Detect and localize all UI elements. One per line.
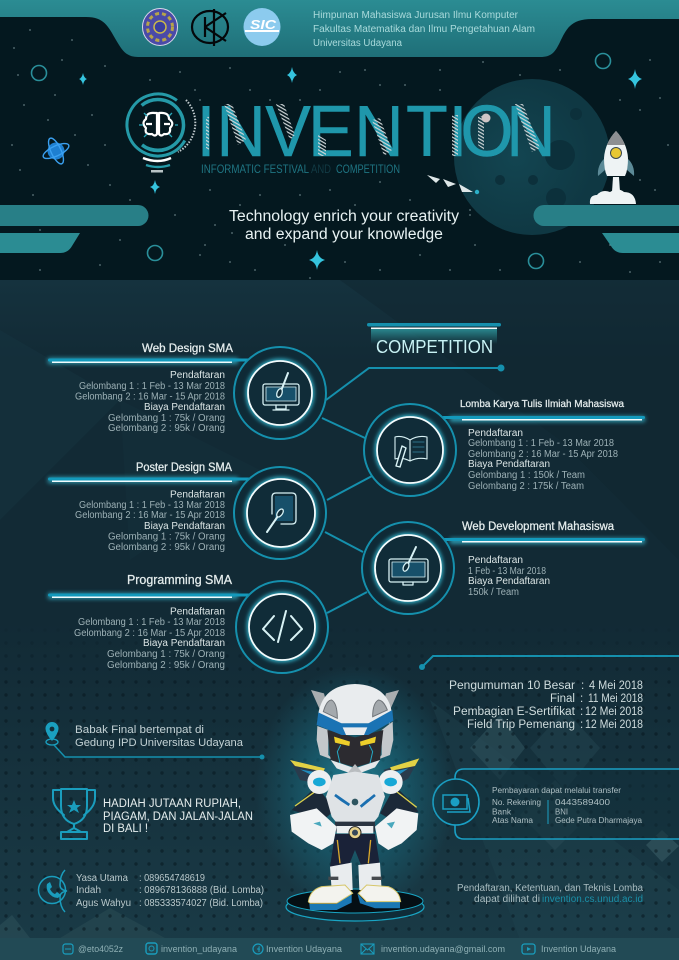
details: Gelombang 2 : 16 Mar - 15 Apr 2018 bbox=[468, 449, 618, 460]
icon: monitor and brush bbox=[362, 522, 454, 614]
details: Gelombang 2 : 16 Mar - 15 Apr 2018 bbox=[74, 628, 225, 639]
title bar bbox=[48, 477, 250, 483]
payment details bbox=[492, 786, 643, 825]
footer bar bbox=[0, 938, 679, 960]
schedule: Field Trip Pemenang bbox=[467, 719, 575, 731]
contacts: : 085333574027 (Bid. Lomba) bbox=[139, 898, 263, 909]
final venue: Gedung IPD Universitas Udayana bbox=[75, 737, 244, 749]
details: Biaya Pendaftaran bbox=[143, 638, 225, 649]
payment details: Gede Putra Dharmajaya bbox=[555, 816, 643, 825]
details: Biaya Pendaftaran bbox=[468, 576, 550, 587]
heading: Web Design SMA bbox=[142, 343, 233, 355]
panel: lomba karya tulis bbox=[364, 398, 645, 496]
schedule: : bbox=[581, 680, 584, 692]
details: Gelombang 2 : 16 Mar - 15 Apr 2018 bbox=[75, 392, 225, 402]
heading: Web Development Mahasiswa bbox=[462, 521, 615, 533]
registration note: Pendaftaran, Ketentuan, dan Teknis Lomba bbox=[457, 883, 643, 894]
subtitle: INFORMATIC FESTIVAL bbox=[201, 162, 309, 176]
icon: rocket bbox=[590, 131, 636, 204]
social: instagram: invention_udayana bbox=[161, 944, 237, 954]
details bbox=[74, 606, 225, 671]
prize: PIAGAM, DAN JALAN-JALAN bbox=[103, 811, 253, 823]
details bbox=[75, 490, 225, 553]
payment details: Atas Nama bbox=[492, 816, 534, 825]
social: facebook: Invention Udayana bbox=[266, 944, 342, 954]
social: @eto4052z: @eto4052z bbox=[78, 944, 123, 954]
registration note: invention.cs.unud.ac.id bbox=[542, 894, 643, 905]
lower background bbox=[0, 280, 679, 960]
subtitle: COMPETITION bbox=[336, 162, 400, 176]
header background with stars bbox=[0, 0, 679, 280]
details: Gelombang 2 : 95k / Orang bbox=[107, 660, 225, 671]
payment details: No. Rekening bbox=[492, 798, 541, 807]
icon: money bbox=[433, 779, 479, 825]
details: 1 Feb - 13 Mar 2018 bbox=[468, 566, 546, 577]
ring decorations bbox=[32, 54, 610, 268]
panel: web design SMA bbox=[48, 343, 326, 439]
schedule bbox=[419, 656, 679, 731]
icon: book and pencil bbox=[364, 404, 456, 496]
details: Gelombang 1 : 75k / Orang bbox=[107, 649, 225, 660]
mascot robot bbox=[255, 665, 455, 921]
logo: SIC bbox=[244, 8, 280, 46]
connector lines bbox=[322, 368, 500, 613]
details: Gelombang 2 : 16 Mar - 15 Apr 2018 bbox=[75, 510, 225, 521]
prize: DI BALI ! bbox=[103, 823, 148, 835]
registration note: dapat dilihat di bbox=[474, 894, 540, 905]
title bar bbox=[48, 593, 250, 599]
payment details: 0443589400 bbox=[555, 798, 611, 807]
competition heading bbox=[367, 323, 504, 372]
heading: Programming SMA bbox=[127, 573, 233, 587]
title bar bbox=[442, 416, 645, 422]
icon: shooting rockets bbox=[427, 175, 479, 194]
icon: map pin bbox=[45, 722, 59, 745]
contacts bbox=[38, 870, 264, 912]
schedule: : bbox=[580, 719, 583, 731]
details bbox=[75, 370, 225, 434]
details bbox=[468, 555, 550, 598]
registration note bbox=[457, 883, 643, 905]
panel: payment bbox=[433, 769, 679, 839]
sparkle stars bbox=[79, 67, 642, 270]
social: youtube: Invention Udayana bbox=[541, 944, 616, 954]
details: Gelombang 1 : 150k / Team bbox=[468, 470, 585, 481]
logo: university seal bbox=[142, 8, 178, 46]
side pills bbox=[0, 205, 679, 253]
icon: code brackets bbox=[236, 581, 328, 673]
contacts: Agus Wahyu bbox=[76, 898, 131, 909]
panel: poster design SMA bbox=[48, 462, 326, 559]
details: Gelombang 1 : 1 Feb - 13 Mar 2018 bbox=[79, 500, 225, 511]
organiser text: Fakultas Matematika dan Ilmu Pengetahuan Alam bbox=[313, 24, 535, 35]
schedule: : bbox=[580, 693, 583, 705]
final venue: Babak Final bertempat di bbox=[75, 724, 204, 736]
contacts: Yasa Utama bbox=[76, 873, 128, 884]
subtitle bbox=[201, 162, 400, 176]
details: Gelombang 2 : 175k / Team bbox=[468, 481, 584, 492]
final venue bbox=[45, 722, 264, 760]
panel: programming SMA bbox=[48, 573, 328, 673]
details: Biaya Pendaftaran bbox=[468, 459, 550, 470]
details: Gelombang 1 : 1 Feb - 13 Mar 2018 bbox=[78, 617, 225, 628]
heading: Poster Design SMA bbox=[136, 462, 232, 474]
icon: phone bbox=[38, 870, 67, 912]
prize bbox=[53, 789, 253, 839]
details: Pendaftaran bbox=[170, 370, 225, 381]
schedule: Pengumuman 10 Besar bbox=[449, 680, 575, 692]
icon: brain light bulb bbox=[116, 83, 200, 172]
title bar bbox=[442, 538, 645, 544]
details: Biaya Pendaftaran bbox=[144, 402, 225, 413]
details: Gelombang 1 : 75k / Orang bbox=[108, 413, 225, 424]
schedule: Pembagian E-Sertifikat bbox=[453, 706, 576, 718]
payment details: Bank bbox=[492, 808, 512, 816]
title bar bbox=[48, 358, 250, 364]
details: 150k / Team bbox=[468, 587, 519, 598]
schedule: 12 Mei 2018 bbox=[585, 719, 643, 731]
competition heading: COMPETITION bbox=[376, 337, 493, 357]
tagline bbox=[229, 208, 459, 243]
payment details: Pembayaran dapat melalui transfer bbox=[492, 786, 621, 795]
icon: trophy bbox=[53, 789, 95, 839]
details: Pendaftaran bbox=[170, 490, 225, 500]
organiser text: Universitas Udayana bbox=[313, 38, 402, 49]
prize: HADIAH JUTAAN RUPIAH, bbox=[103, 798, 241, 810]
details: Pendaftaran bbox=[468, 555, 523, 566]
logo: K emblem bbox=[192, 9, 228, 46]
subtitle: AND bbox=[311, 162, 331, 176]
tagline: and expand your knowledge bbox=[245, 226, 443, 243]
details: Gelombang 2 : 95k / Orang bbox=[108, 423, 225, 434]
icon: planet bbox=[41, 136, 71, 166]
contacts: : 089654748619 bbox=[139, 873, 205, 884]
schedule: 12 Mei 2018 bbox=[585, 706, 643, 718]
details: Gelombang 1 : 75k / Orang bbox=[108, 532, 225, 542]
social: email: invention.udayana@gmail.com bbox=[381, 944, 505, 954]
moon bbox=[454, 79, 610, 235]
icon: monitor and brush bbox=[234, 347, 326, 439]
details: Pendaftaran bbox=[468, 428, 523, 439]
details: Gelombang 1 : 1 Feb - 13 Mar 2018 bbox=[468, 438, 614, 449]
details: Gelombang 1 : 1 Feb - 13 Mar 2018 bbox=[79, 381, 225, 392]
schedule: Final bbox=[550, 693, 575, 705]
details: Pendaftaran bbox=[170, 606, 225, 618]
schedule: : bbox=[580, 706, 583, 718]
heading: Lomba Karya Tulis Ilmiah Mahasiswa bbox=[460, 398, 624, 410]
contacts: Indah bbox=[76, 885, 101, 896]
details bbox=[468, 428, 618, 492]
contacts: : 089678136888 (Bid. Lomba) bbox=[139, 885, 264, 896]
organiser text bbox=[313, 10, 535, 49]
icon: document and brush bbox=[234, 467, 326, 559]
schedule: 4 Mei 2018 bbox=[589, 680, 643, 692]
panel: web development mahasiswa bbox=[362, 521, 645, 614]
schedule: 11 Mei 2018 bbox=[588, 693, 643, 705]
platform bbox=[286, 889, 424, 921]
logo: SIC: SIC bbox=[250, 17, 277, 32]
title: INVENTION bbox=[196, 90, 556, 171]
tagline: Technology enrich your creativity bbox=[229, 208, 459, 225]
payment details: BNI bbox=[555, 808, 568, 816]
details: Gelombang 2 : 95k / Orang bbox=[108, 542, 225, 553]
organiser text: Himpunan Mahasiswa Jurusan Ilmu Komputer bbox=[313, 10, 519, 21]
header band bbox=[0, 0, 679, 57]
details: Biaya Pendaftaran bbox=[144, 521, 225, 532]
